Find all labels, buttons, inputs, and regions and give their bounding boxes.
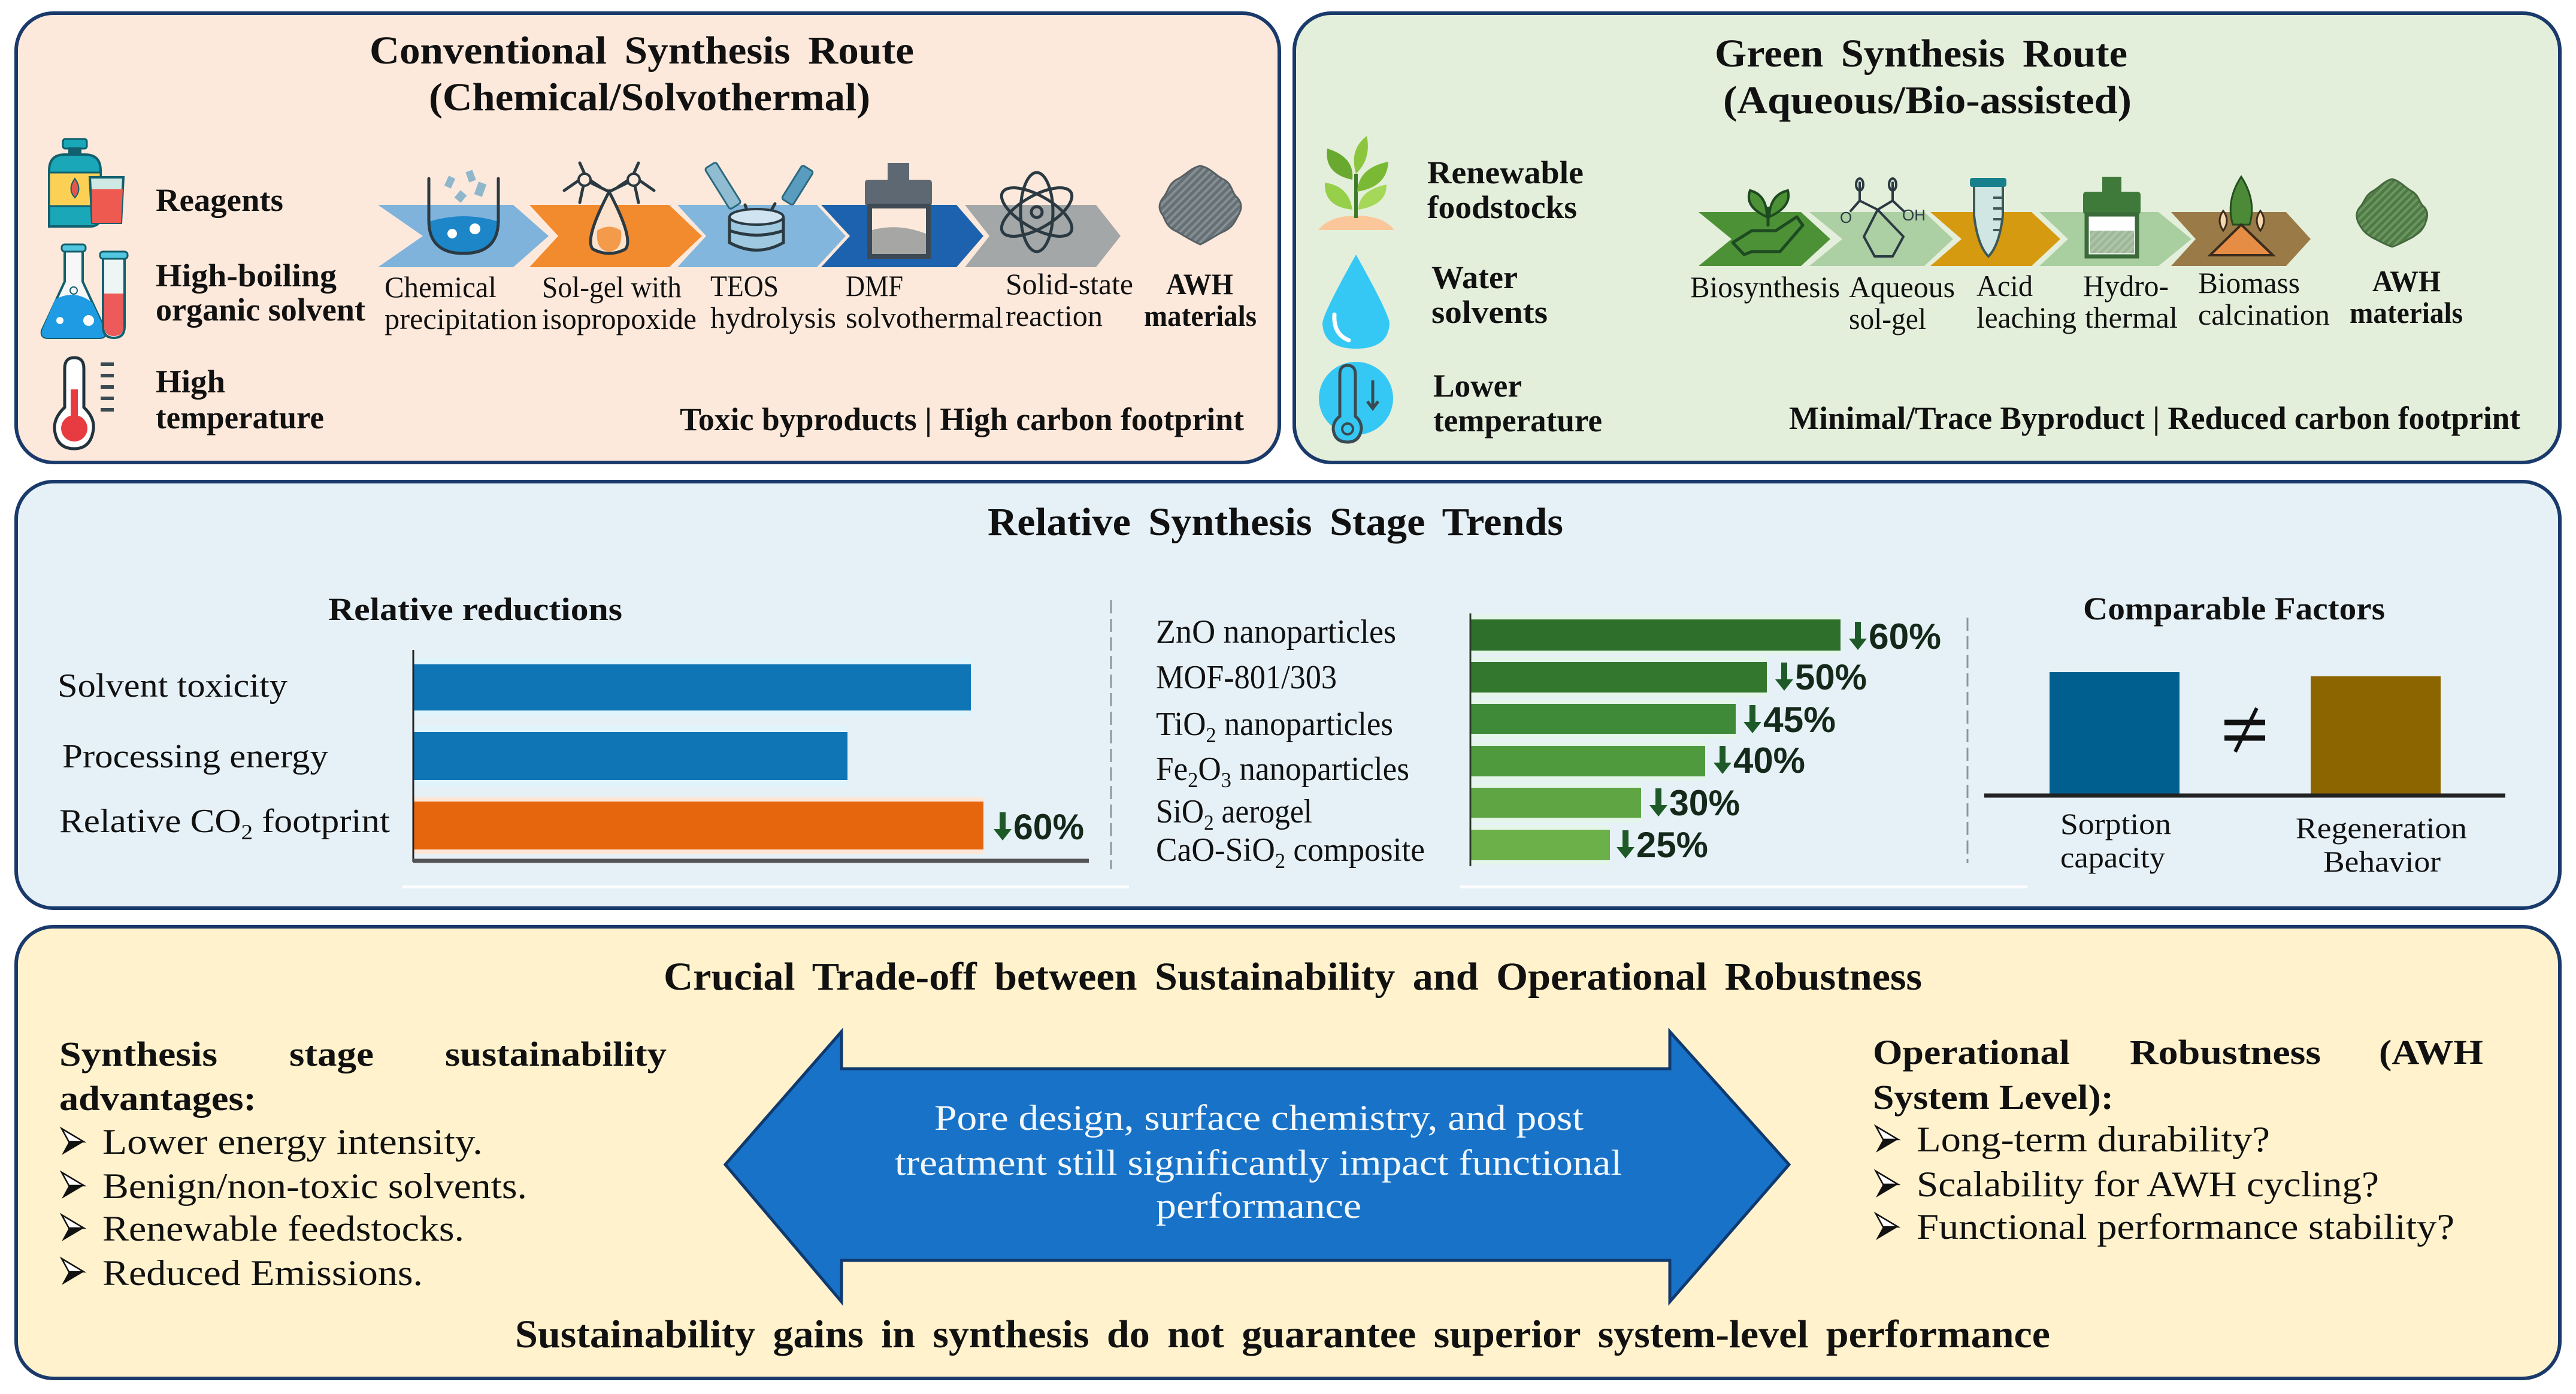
panel: crucial trade-off <box>16 927 2560 1378</box>
icon: AWH material blob <box>1160 166 1241 244</box>
label: high temperature <box>156 364 324 436</box>
text block: operational robustness: Robustness <box>2130 1033 2321 1072</box>
text block: sustainability advantages: Benign/non-toxic solvents. <box>102 1166 527 1206</box>
row labels: materials: SiO <box>1156 793 1208 830</box>
values: material percent reductions: 30% <box>1669 783 1740 823</box>
row labels: materials: 2 <box>1204 811 1214 834</box>
bars: materials <box>1470 619 1841 860</box>
label: high temperature: High <box>156 364 225 400</box>
factor labels <box>2060 807 2467 878</box>
icon: hydrothermal autoclave <box>2083 177 2141 256</box>
heading: green route <box>1715 32 2132 122</box>
values: material percent reductions: 60% <box>1869 616 1941 657</box>
row labels: materials: O <box>1198 751 1221 788</box>
label: lower temperature: temperature <box>1433 403 1602 439</box>
row labels: materials: 2 <box>1275 849 1285 873</box>
text block: operational robustness: System Level): <box>1873 1078 2114 1117</box>
text block: sustainability advantages: Reduced Emissions. <box>102 1253 423 1293</box>
text block: operational robustness: Operational <box>1873 1033 2070 1072</box>
icon: high temperature thermometer <box>55 358 114 449</box>
arrow text: treatment still significantly impact functional <box>895 1143 1622 1183</box>
panel: conventional synthesis route <box>16 13 1279 462</box>
stage labels: conventional: solvothermal <box>846 301 1003 334</box>
bar chart: material reductions <box>1156 613 2027 888</box>
row labels: relative reductions: Relative CO <box>59 803 226 840</box>
bars: relative reductions <box>413 664 983 849</box>
values: material percent reductions: 50% <box>1795 657 1867 697</box>
label: lower temperature <box>1433 368 1602 439</box>
stage labels: conventional: Sol-gel with <box>542 270 682 304</box>
values: material percent reductions: 45% <box>1763 700 1836 740</box>
row labels: materials: MOF-801/303 <box>1156 659 1337 696</box>
arrow text <box>895 1098 1622 1226</box>
process chevrons: conventional <box>378 205 1121 267</box>
factor labels: capacity <box>2060 840 2165 874</box>
stage labels: conventional: Solid-state <box>1006 267 1133 301</box>
icon: aqueous sol-gel molecule: OH <box>1902 206 1926 224</box>
stage labels: conventional <box>385 267 1257 335</box>
icon: acid leaching tube <box>1970 178 2006 256</box>
bar chart: relative reductions <box>57 591 1129 888</box>
label: renewable foodstocks: Renewable <box>1427 155 1584 190</box>
factor labels: Sorption <box>2060 807 2171 840</box>
values: material percent reductions: 25% <box>1636 825 1708 865</box>
row labels: materials: 2 <box>1188 768 1198 792</box>
stage labels: green: calcination <box>2198 298 2330 331</box>
icon: green AWH material blob <box>2357 179 2427 247</box>
callout: green benefits: Minimal/Trace Byproduct | Reduced carbon footprint <box>1789 400 2520 436</box>
icon: plant sprout <box>1318 136 1394 230</box>
text block: sustainability advantages: advantages: <box>59 1079 256 1118</box>
text block: operational robustness: Functional performance stability? <box>1917 1207 2454 1247</box>
row labels: relative reductions: footprint <box>253 803 390 840</box>
icon: aqueous sol-gel molecule: O <box>1840 208 1852 226</box>
label: renewable foodstocks <box>1427 155 1584 225</box>
chart title: relative reductions: Relative reductions <box>328 591 622 627</box>
icon: aqueous sol-gel molecule <box>1840 179 1926 256</box>
panel: relative synthesis stage trends <box>16 482 2560 908</box>
factor labels: Behavior <box>2323 845 2441 878</box>
row labels: materials: Fe <box>1156 751 1189 788</box>
conclusion: Sustainability gains in synthesis do not guarantee superior system-level performance <box>515 1313 2050 1356</box>
values: material percent reductions <box>1617 616 1941 865</box>
heading: trade-off: Crucial Trade-off between Sustainability and Operational Robustness <box>664 955 1922 999</box>
stage labels: conventional: Chemical <box>385 270 497 304</box>
row labels: relative reductions <box>57 667 390 844</box>
heading: green route: (Aqueous/Bio-assisted) <box>1723 78 2132 122</box>
stage labels: conventional: materials <box>1144 299 1257 332</box>
value: 60 percent CO2: 60% <box>1013 807 1084 847</box>
stage labels: green: Acid <box>1976 269 2033 303</box>
icon: reagent bottle and beaker <box>49 139 123 226</box>
row labels: materials: nanoparticles <box>1216 706 1393 743</box>
stage labels: green: Biosynthesis <box>1690 270 1840 304</box>
stage labels: conventional: DMF <box>846 269 903 303</box>
icon: lower temperature <box>1319 362 1393 442</box>
icon: biomass calcination <box>2210 177 2273 255</box>
stage labels: green: materials <box>2350 296 2463 329</box>
heading: conventional route: Conventional Synthesis Route <box>370 29 914 72</box>
stage labels: green: Biomass <box>2198 266 2300 300</box>
stage labels: green: AWH <box>2372 264 2441 298</box>
heading: relative synthesis stage trends: Relative Synthesis Stage Trends <box>988 500 1563 544</box>
row labels: materials: nanoparticles <box>1231 751 1409 788</box>
heading: conventional route <box>370 29 914 119</box>
panel: green synthesis route <box>1294 13 2560 462</box>
values: material percent reductions: 40% <box>1733 740 1805 781</box>
stage labels: conventional: AWH <box>1166 267 1233 301</box>
icon: hand holding plant <box>1733 190 1803 255</box>
icon: sol-gel isopropoxide molecule <box>564 163 654 253</box>
stage labels: green: Aqueous <box>1849 270 1955 304</box>
label: water solvents: solvents <box>1431 294 1548 330</box>
label: high-boiling organic solvent: High-boiling <box>156 258 337 294</box>
stage labels: green <box>1690 264 2463 335</box>
icon: flask and test tube <box>42 244 128 338</box>
text block: operational robustness: Scalability for AWH cycling? <box>1917 1165 2379 1204</box>
stage labels: green: thermal <box>2085 301 2178 334</box>
label: lower temperature: Lower <box>1433 368 1522 404</box>
not-equal sign <box>2224 708 2265 752</box>
icon: solid-state reaction atom <box>994 173 1079 252</box>
label: high temperature: temperature <box>156 400 324 436</box>
row labels: materials: 2 <box>1206 723 1216 747</box>
icon: water drop <box>1322 255 1390 349</box>
label: renewable foodstocks: foodstocks <box>1427 189 1577 225</box>
row labels: materials <box>1156 613 1425 873</box>
chart title: comparable factors: Comparable Factors <box>2083 591 2385 627</box>
chart: comparable factors <box>1984 591 2505 878</box>
text block: sustainability advantages <box>59 1035 667 1293</box>
text block: operational robustness: Long-term durability? <box>1917 1120 2270 1159</box>
stage labels: green: Hydro- <box>2083 269 2169 303</box>
label: high-boiling organic solvent: organic solvent <box>156 292 365 328</box>
icon: TEOS hydrolysis droppers and jar <box>704 162 813 250</box>
row labels: materials: composite <box>1285 831 1425 869</box>
text block: sustainability advantages: Lower energy intensity. <box>102 1122 483 1162</box>
stage labels: conventional: reaction <box>1006 299 1103 332</box>
row labels: relative reductions: Processing energy <box>62 738 328 775</box>
row labels: materials: ZnO nanoparticles <box>1156 613 1396 651</box>
row labels: materials: CaO-SiO <box>1156 831 1281 869</box>
stage labels: green: leaching <box>1976 301 2076 334</box>
arrow: double-headed trade-off <box>725 1032 1789 1302</box>
text block: sustainability advantages: sustainability <box>445 1035 667 1074</box>
icon: chemical precipitation beaker <box>429 170 498 253</box>
text block: sustainability advantages: Synthesis <box>59 1035 217 1074</box>
stage labels: conventional: TEOS <box>710 269 779 303</box>
text block: sustainability advantages: Renewable feedstocks. <box>102 1209 464 1248</box>
stage labels: green: sol-gel <box>1849 302 1926 335</box>
arrow text: performance <box>1156 1186 1361 1226</box>
label: reagents: Reagents <box>156 182 283 218</box>
stage labels: conventional: isopropoxide <box>542 302 697 335</box>
icon: DMF solvothermal autoclave <box>865 163 932 256</box>
heading: conventional route: (Chemical/Solvothermal) <box>429 75 870 119</box>
label: water solvents <box>1431 259 1548 330</box>
row labels: materials: 3 <box>1221 768 1231 792</box>
heading: green route: Green Synthesis Route <box>1715 32 2127 75</box>
row labels: materials: TiO <box>1156 706 1209 743</box>
row labels: relative reductions: 2 <box>241 820 253 844</box>
process chevrons: green <box>1699 212 2311 266</box>
arrow text: Pore design, surface chemistry, and post <box>934 1098 1584 1138</box>
label: water solvents: Water <box>1431 259 1518 295</box>
text block: sustainability advantages: stage <box>289 1035 374 1074</box>
text block: operational robustness: (AWH <box>2379 1033 2483 1072</box>
callout: conventional drawbacks: Toxic byproducts | High carbon footprint <box>680 401 1244 437</box>
stage labels: conventional: precipitation <box>385 302 537 335</box>
factor labels: Regeneration <box>2296 811 2467 845</box>
stage labels: conventional: hydrolysis <box>710 301 836 334</box>
label: high-boiling organic solvent <box>156 258 365 328</box>
row labels: relative reductions: Solvent toxicity <box>57 667 287 704</box>
text block: operational robustness <box>1873 1033 2483 1247</box>
row labels: materials: aerogel <box>1214 793 1312 830</box>
